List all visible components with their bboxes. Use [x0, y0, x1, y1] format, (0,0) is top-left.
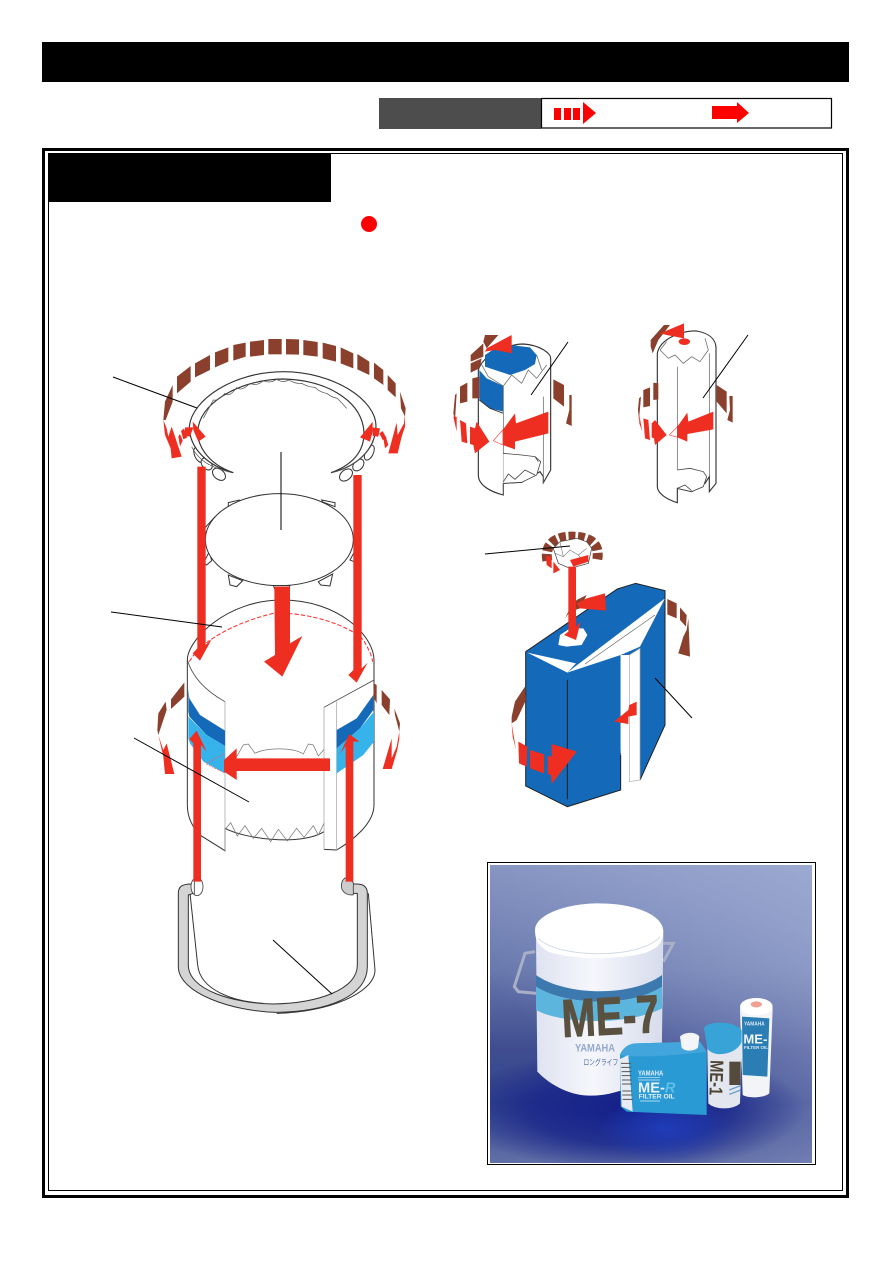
wire handle: [178, 877, 375, 1013]
diagram: exploded pail filter, upper part: [163, 339, 406, 594]
rotation arrow: top ring: [163, 339, 406, 458]
rotation arrow: [453, 335, 572, 426]
ME-R cap: [680, 1033, 699, 1051]
icon: solid red arrow: [712, 102, 749, 123]
filter disc: [200, 494, 354, 587]
pail handle: [514, 943, 673, 993]
handle hooks: [191, 877, 353, 896]
white top seams: [527, 653, 576, 673]
photo: filter oil products: ロングライフ: [583, 1057, 618, 1067]
photo: filter oil products: YAMAHA: [744, 1022, 765, 1028]
icon: dashed red arrow: [554, 102, 596, 124]
cylinder B: [638, 323, 733, 503]
diagram: bottle pack (blue box): [512, 537, 690, 807]
pail text: ME-7: [560, 985, 660, 1049]
pail lid: [535, 903, 663, 958]
main panel frame: [44, 150, 848, 1196]
cylinder A with blue element: [453, 335, 572, 495]
pail bands: [536, 975, 662, 1002]
photo: filter oil products: [487, 862, 816, 1165]
legend key box: [542, 98, 832, 128]
box body: [526, 583, 665, 807]
photo: filter oil products: YAMAHA: [575, 1043, 615, 1055]
icon: red bullet: [361, 216, 377, 232]
panel heading: [48, 153, 331, 202]
legend: [379, 98, 832, 129]
red arrows on box: [512, 567, 637, 784]
pail: [536, 935, 663, 1096]
photo: filter oil products: FILTER OIL: [744, 1045, 768, 1051]
inner filter teeth: [226, 744, 324, 842]
rotation arrow behind box: [565, 595, 690, 657]
rotation arrows: pail body: [157, 682, 400, 774]
diagrams: small cylinders: [453, 323, 733, 503]
photo: filter oil products: ME-: [743, 1031, 767, 1046]
diagram: pail body and handle: [157, 600, 400, 1013]
filter tab: [273, 586, 290, 594]
white slot: [621, 648, 640, 782]
legend label box: [379, 98, 541, 129]
leader lines: [111, 335, 748, 994]
red dot on element: [679, 338, 690, 345]
dashed red seal line: [189, 613, 373, 662]
red arrows: top assembly paths: [193, 467, 368, 683]
red arrows: lower assembly paths: [189, 731, 359, 882]
photo: filter oil products: FILTER OIL: [639, 1094, 675, 1101]
spring ring: [189, 372, 376, 484]
blue bands: [188, 688, 374, 773]
small ME-1 bottle: [707, 1042, 742, 1108]
ME-R bottle: [620, 1042, 707, 1115]
red arrows on ring: [178, 422, 388, 448]
photo: filter oil products: ME-R: [638, 1080, 676, 1096]
tall bottle: [740, 1008, 773, 1097]
cap opening: [558, 628, 587, 647]
rotation arrow: [638, 325, 733, 423]
rotation arrow: left: [512, 687, 526, 723]
photo: filter oil products: ME-1: [705, 1060, 728, 1096]
photo background: [490, 865, 812, 1163]
title bar: [42, 42, 849, 82]
small filter on box: [546, 537, 598, 573]
pail body: [187, 600, 374, 851]
photo: filter oil products: YAMAHA: [638, 1069, 664, 1078]
